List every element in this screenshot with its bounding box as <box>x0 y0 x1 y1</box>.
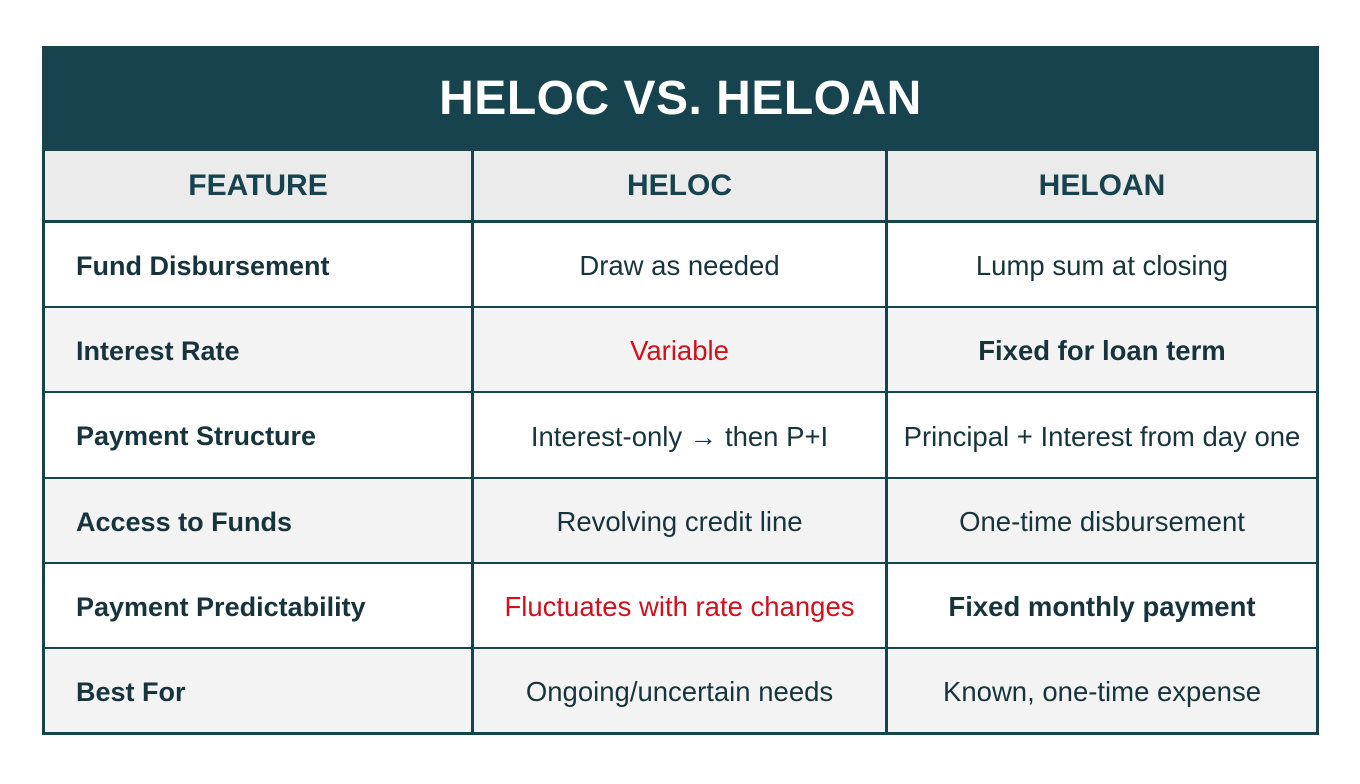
row: access to funds: One-time disbursement <box>959 506 1245 537</box>
row: interest rate: Variable <box>630 335 729 366</box>
row: payment structure: Interest-only → then P+I <box>531 420 828 452</box>
row: interest rate: Fixed for loan term <box>978 335 1226 366</box>
title: HELOC VS. HELOAN <box>439 72 922 124</box>
row: best for: Ongoing/uncertain needs <box>526 676 833 707</box>
row: fund disbursement <box>45 223 1316 306</box>
header: heloc <box>474 151 885 220</box>
row: payment structure: Payment Structure <box>76 421 316 451</box>
row: payment predictability: Fluctuates with rate changes <box>504 591 855 622</box>
row: fund disbursement: Draw as needed <box>579 250 780 281</box>
row: payment predictability: Payment Predictability <box>76 592 366 622</box>
row: fund disbursement: Fund Disbursement <box>76 250 330 280</box>
row: payment structure: Principal + Interest from day one <box>904 420 1300 452</box>
row: best for: Known, one-time expense <box>943 676 1261 707</box>
row: best for <box>45 649 1316 732</box>
row: fund disbursement: Lump sum at closing <box>976 250 1228 281</box>
row: access to funds: Revolving credit line <box>556 506 803 537</box>
header: heloc: HELOC <box>627 168 732 202</box>
header: heloan: HELOAN <box>1039 168 1165 202</box>
row: access to funds: Access to Funds <box>76 506 292 536</box>
row: interest rate <box>45 308 1316 391</box>
row: best for: Best For <box>76 676 186 706</box>
header: feature: FEATURE <box>188 168 328 202</box>
row: payment predictability <box>45 564 1316 647</box>
header: feature <box>45 151 471 220</box>
row: interest rate: Interest Rate <box>76 336 240 366</box>
row: access to funds <box>45 479 1316 562</box>
header: heloan <box>888 151 1316 220</box>
row: payment predictability: Fixed monthly payment <box>948 591 1256 622</box>
row: payment structure <box>45 393 1316 477</box>
